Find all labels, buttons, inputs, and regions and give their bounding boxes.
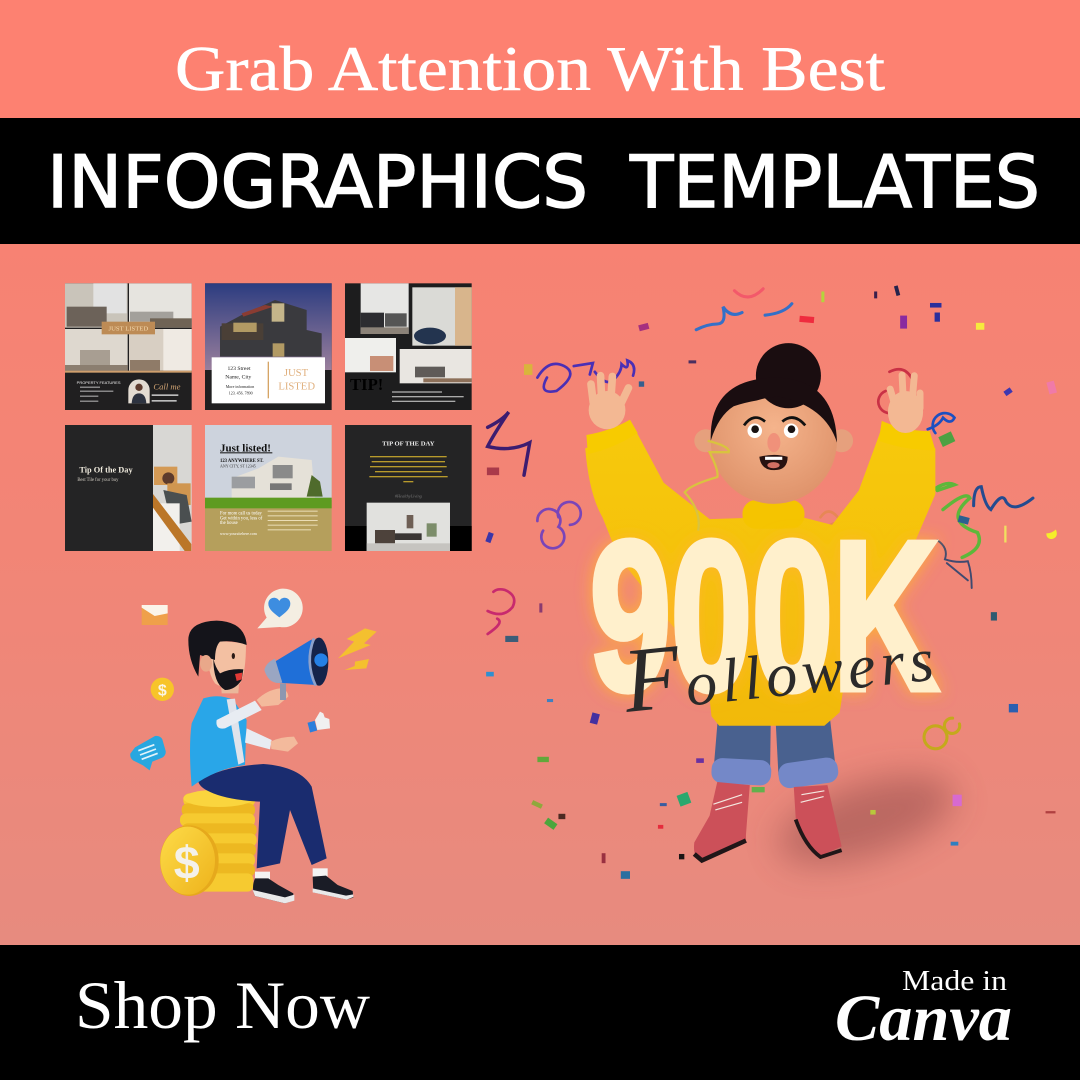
shirt placket (227, 699, 244, 765)
shorts (711, 716, 840, 790)
thumbnail 6: tip of the day dark: TIP OF THE DAY (382, 441, 435, 448)
badge: Made in Canva: Canva (835, 982, 1012, 1055)
thumbnail 2: house just listed (205, 283, 332, 410)
script label: Followers: Followers (617, 598, 937, 732)
thumbnail 1: just listed gold: JUST LISTED (109, 326, 148, 333)
mouth (759, 455, 788, 470)
right cuff (879, 421, 935, 450)
title: INFOGRAPHICS TEMPLATES: TEMPLATES (629, 140, 1040, 224)
icon: envelope (142, 605, 168, 625)
thumbnail 4: tip of the day stairs: Best Tile for your buy (77, 478, 119, 483)
sweater collar (742, 500, 804, 529)
confetti (485, 285, 1057, 879)
arms (216, 688, 298, 752)
call to action: Shop Now: Shop Now (75, 967, 370, 1043)
icon: dollar coin small: $ (158, 682, 167, 699)
hair bun (756, 343, 821, 408)
thumbnail 5: just listed house (205, 425, 332, 551)
template thumbnails grid (65, 283, 472, 551)
thumbnail 5: just listed house: Get within you, less of (220, 516, 263, 521)
streamer over shoulder (685, 441, 729, 531)
icon: heart speech bubble (257, 589, 303, 628)
title band (0, 118, 1080, 244)
coin stack: $ (174, 836, 200, 888)
thumbnail 1: just listed gold: Call me (153, 381, 181, 391)
thumbnail 1: just listed gold (65, 283, 192, 410)
thumbnail 4: tip of the day stairs: Tip Of the Day (79, 466, 133, 475)
thumbnail 2: house just listed: Name, City (225, 374, 252, 380)
header band (0, 0, 1080, 118)
thumbnail 5: just listed house: Just listed! (220, 443, 271, 455)
icon: dollar coin small (151, 678, 174, 701)
badge: Made in Canva: Made in (902, 965, 1008, 997)
thumbnail 2: house just listed: More information (226, 384, 254, 389)
illustration: celebrating character with confetti (485, 285, 1057, 882)
thumbnail 2: house just listed: LISTED (278, 381, 315, 392)
boots (694, 782, 842, 862)
thumbnail 5: just listed house: the house (220, 521, 238, 526)
thumbnail 2: house just listed: 123. 456. 7890 (229, 390, 253, 395)
illustration: man with megaphone on coins (130, 589, 377, 903)
title: INFOGRAPHICS TEMPLATES (47, 140, 1040, 224)
thumbnail 5: just listed house: www.yoursitehere.com (220, 531, 258, 536)
head (188, 621, 247, 693)
thumbnail 6: tip of the day dark: #HealthyLiving (395, 493, 423, 498)
thumbnail 1: just listed gold: PROPERTY FEATURES (77, 380, 121, 385)
nose (767, 433, 780, 452)
hair (711, 378, 837, 443)
thumbnail 2: house just listed: 123 Street (227, 366, 251, 372)
floor shadow (768, 757, 965, 882)
shirt (190, 696, 247, 787)
thumbnail 5: just listed house: For more call us today (220, 511, 263, 516)
thumbnail 6: tip of the day dark (345, 425, 472, 551)
megaphone (264, 638, 328, 700)
footer band (0, 945, 1080, 1080)
body and arms: yellow sweater (585, 420, 935, 726)
thumbnail 3: tip (345, 283, 472, 410)
thumbnail 4: tip of the day stairs (65, 425, 192, 551)
hands (589, 375, 923, 433)
thumbnail 3: tip: TIP! (350, 375, 383, 394)
man's trousers (198, 764, 327, 868)
icon: lightning bolts (338, 628, 377, 670)
thumbnail 5: just listed house: ANY CITY, ST 12345 (220, 463, 256, 469)
thumbnail 5: just listed house: 123 ANYWHERE ST. (220, 459, 264, 464)
icon: thumbs up (307, 712, 330, 732)
eyes (744, 418, 805, 438)
heading: Grab Attention With Best: Grab Attention With Best (175, 33, 885, 104)
head (694, 343, 853, 504)
left cuff (586, 420, 638, 454)
thumbnail 2: house just listed: JUST (284, 368, 309, 379)
coin stack (160, 790, 257, 896)
shoes (253, 868, 353, 903)
title: INFOGRAPHICS TEMPLATES: INFOGRAPHICS (47, 140, 588, 224)
icon: chat bubble (130, 736, 166, 770)
